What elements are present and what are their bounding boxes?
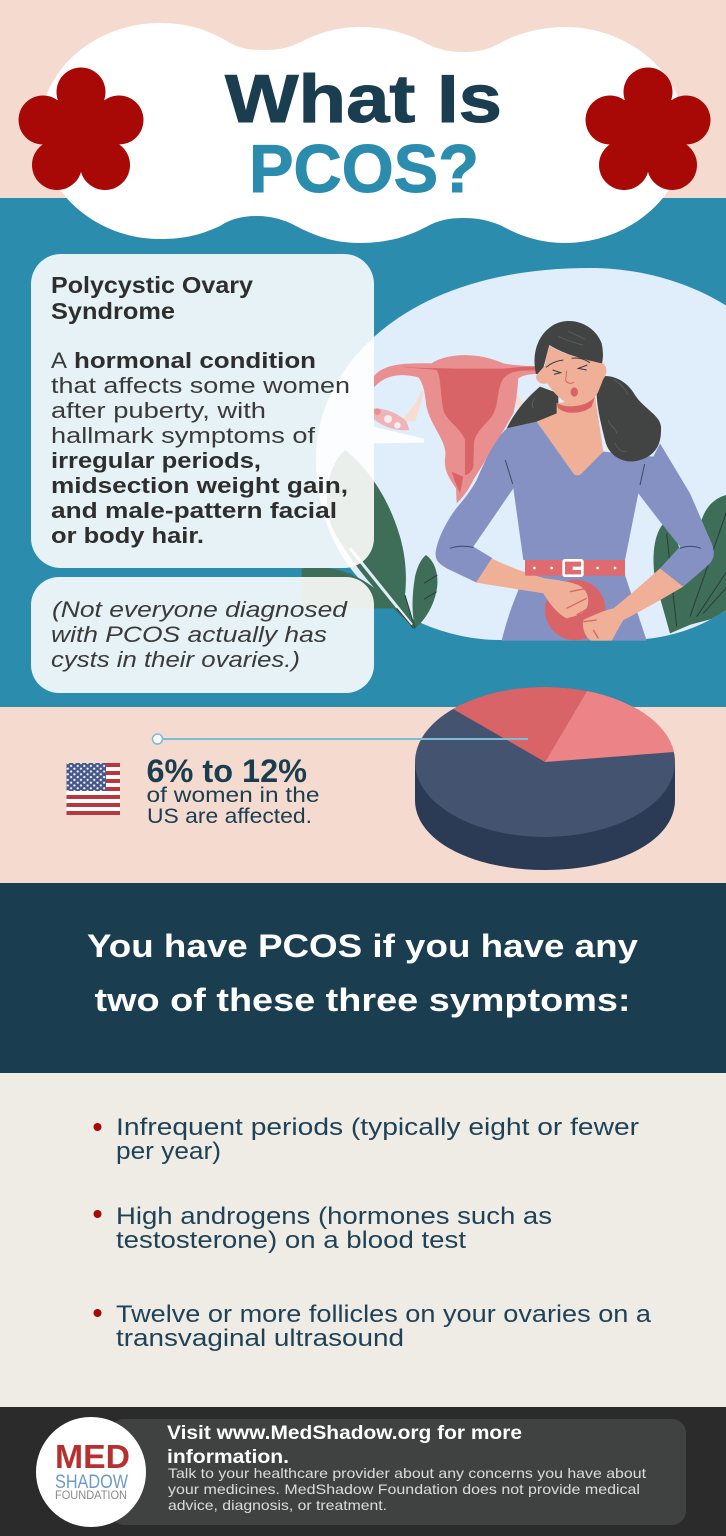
note text bbox=[51, 597, 349, 672]
neck and chest bbox=[537, 397, 603, 475]
left forearm and hand bbox=[476, 558, 588, 618]
definition text bbox=[51, 348, 350, 548]
definition heading bbox=[51, 272, 253, 324]
symptom: infrequent periods: Infrequent periods (typically eight or fewer bbox=[116, 1114, 639, 1141]
statistic text: US are affected. bbox=[147, 805, 312, 828]
statistic text: of women in the bbox=[146, 784, 320, 807]
definition text: that affects some women bbox=[51, 373, 350, 398]
definition text: midsection weight gain, bbox=[51, 473, 348, 498]
definition heading: Polycystic Ovary bbox=[51, 272, 253, 298]
title: What Is bbox=[225, 61, 502, 137]
title bbox=[225, 61, 502, 207]
definition text: irregular periods, bbox=[51, 448, 261, 473]
symptom: follicles bbox=[94, 1301, 652, 1352]
logo: MedShadow Foundation bbox=[36, 1417, 146, 1527]
icon: right flower bbox=[586, 68, 710, 190]
hair top bbox=[535, 321, 603, 374]
illustration backdrop bbox=[316, 268, 726, 640]
definition text: A bbox=[51, 348, 67, 373]
header background bbox=[0, 0, 726, 198]
facial features bbox=[546, 358, 590, 374]
symptom: follicles: Twelve or more follicles on your ovaries on a bbox=[116, 1301, 652, 1328]
panel: definition box bbox=[31, 254, 374, 568]
logo: MedShadow Foundation: MED bbox=[55, 1438, 130, 1475]
left plant bbox=[302, 450, 437, 628]
title: PCOS? bbox=[249, 131, 479, 207]
logo: MedShadow Foundation: FOUNDATION bbox=[55, 1490, 127, 1502]
footer call to action: information. bbox=[167, 1447, 289, 1468]
footer disclaimer: advice, diagnosis, or treatment. bbox=[168, 1497, 387, 1513]
symptom: high androgens bbox=[94, 1203, 552, 1254]
statistic text: 6% to 12% bbox=[146, 753, 307, 789]
slice: 12 percent bbox=[545, 691, 674, 762]
panel: definition background bbox=[0, 198, 726, 707]
panel: diagnosis heading background bbox=[0, 883, 726, 1073]
heading: diagnosis rule bbox=[87, 928, 638, 1018]
logo: MedShadow Foundation: SHADOW bbox=[55, 1472, 128, 1493]
panel: statistic background bbox=[0, 707, 726, 883]
note text: (Not everyone diagnosed bbox=[52, 597, 349, 622]
panel: footer background bbox=[0, 1407, 726, 1536]
note text: cysts in their ovaries.) bbox=[51, 647, 300, 672]
hair right side bbox=[597, 376, 661, 461]
belly bbox=[545, 580, 606, 640]
definition text: hormonal condition bbox=[74, 348, 316, 373]
pie chart bbox=[415, 687, 675, 870]
belt bbox=[525, 560, 625, 576]
uterus bbox=[374, 355, 537, 503]
panel: note box bbox=[31, 577, 374, 693]
callout line bbox=[152, 734, 528, 744]
face bbox=[536, 345, 606, 405]
dress seams bbox=[450, 460, 701, 548]
title cloud bbox=[40, 23, 686, 243]
woman bbox=[436, 321, 714, 641]
icon: left flower bbox=[18, 68, 144, 190]
heading: diagnosis rule: two of these three symptoms: bbox=[94, 982, 630, 1018]
footer call to action bbox=[167, 1423, 522, 1468]
footer disclaimer: Talk to your healthcare provider about any concerns you have about bbox=[168, 1465, 646, 1481]
note text: with PCOS actually has bbox=[51, 622, 327, 647]
definition heading: Syndrome bbox=[51, 298, 175, 324]
panel: symptoms background bbox=[0, 1073, 726, 1407]
symptom list bbox=[94, 1114, 652, 1352]
right forearm and hand bbox=[583, 568, 683, 641]
footer disclaimer bbox=[168, 1465, 646, 1513]
right plant bbox=[653, 495, 726, 633]
neck shadow bbox=[556, 397, 595, 413]
illustration: woman with uterus and plants bbox=[302, 321, 726, 641]
symptom: infrequent periods: per year) bbox=[116, 1138, 221, 1165]
definition text: after puberty, with bbox=[51, 398, 266, 423]
definition text: or body hair. bbox=[51, 523, 204, 548]
dress bbox=[436, 422, 714, 641]
symptom: high androgens: testosterone) on a blood test bbox=[116, 1227, 466, 1254]
definition text: hallmark symptoms of bbox=[51, 423, 316, 448]
footer call to action: Visit www.MedShadow.org for more bbox=[167, 1423, 522, 1444]
statistic text bbox=[146, 753, 320, 828]
symptom: infrequent periods bbox=[94, 1114, 639, 1165]
symptom: follicles: transvaginal ultrasound bbox=[116, 1325, 404, 1352]
heading: diagnosis rule: You have PCOS if you have any bbox=[87, 928, 638, 964]
hair behind shoulder bbox=[507, 387, 558, 428]
symptom: high androgens: High androgens (hormones such as bbox=[116, 1203, 552, 1230]
footer disclaimer: your medicines. MedShadow Foundation does not provide medical bbox=[168, 1481, 640, 1497]
definition text: and male-pattern facial bbox=[51, 498, 337, 523]
icon: US flag bbox=[66, 763, 120, 815]
slice: 6 percent bbox=[453, 687, 587, 762]
footer panel bbox=[110, 1419, 686, 1525]
